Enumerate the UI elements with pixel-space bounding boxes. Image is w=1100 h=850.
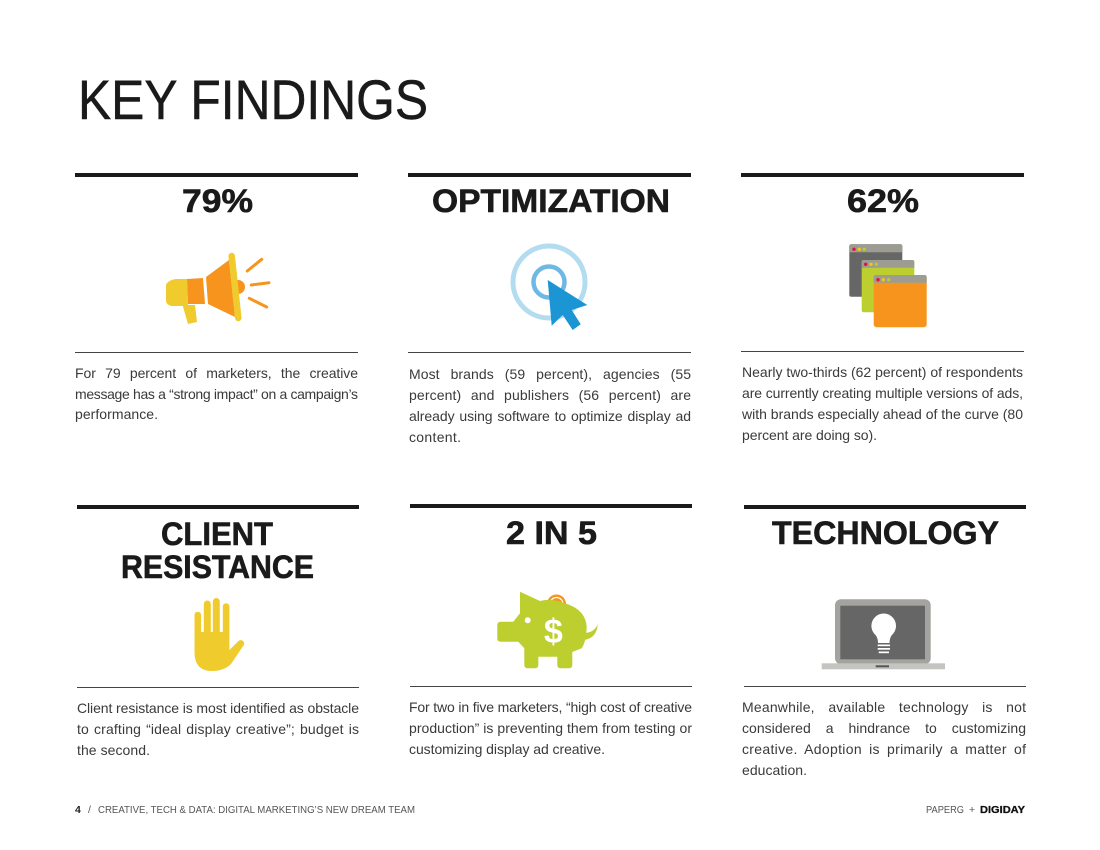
text: 62% body: are currently creating multiple versions of ads, bbox=[742, 385, 1023, 401]
footer: logos: + bbox=[969, 804, 975, 816]
text: technology body: education. bbox=[742, 762, 807, 778]
panel: client resistance bbox=[77, 505, 359, 758]
text: optimization body: Most brands (59 percent), agencies (55 bbox=[409, 366, 691, 382]
text: optimization body bbox=[409, 366, 691, 445]
text: technology body bbox=[742, 699, 1026, 778]
icon: piggy bank: $ bbox=[544, 613, 563, 651]
text: 62% body bbox=[741, 364, 1023, 443]
heading: technology: TECHNOLOGY bbox=[772, 515, 999, 551]
heading: 2 in 5: 2 IN 5 bbox=[506, 515, 597, 551]
text: 79% body: performance. bbox=[75, 406, 158, 422]
text: 2 in 5 body: customizing display ad creative. bbox=[409, 741, 605, 757]
icon: browser windows bbox=[849, 244, 927, 327]
text: optimization body: already using software to optimize display ad bbox=[409, 408, 691, 424]
panel: 79% bbox=[75, 173, 358, 422]
footer: logos: DIGIDAY bbox=[980, 804, 1025, 816]
icon: target and cursor bbox=[513, 246, 587, 330]
icon: piggy bank bbox=[497, 592, 598, 668]
icon: raised hand bbox=[194, 598, 244, 671]
panel: 62% bbox=[741, 173, 1024, 443]
text: 2 in 5 body bbox=[409, 699, 692, 757]
text: client resistance body: the second. bbox=[77, 742, 150, 758]
text: 62% body: percent are doing so). bbox=[742, 427, 877, 443]
footer: page title: CREATIVE, TECH & DATA: DIGITAL MARKETING’S NEW DREAM TEAM bbox=[98, 804, 415, 816]
heading: 62%: 62% bbox=[847, 183, 919, 219]
text: technology body: Meanwhile, available technology is not bbox=[742, 699, 1026, 715]
footer: logos bbox=[926, 804, 1025, 816]
text: 79% body: message has a “strong impact” on a campaign’s bbox=[75, 386, 358, 402]
heading: client resistance: CLIENT bbox=[161, 516, 273, 552]
text: 62% body: Nearly two-thirds (62 percent) of respondents bbox=[742, 364, 1023, 380]
text: technology body: creative. Adoption is primarily a matter of bbox=[742, 741, 1026, 757]
icon: megaphone bbox=[166, 256, 269, 324]
panel: 2 in 5 bbox=[409, 504, 692, 757]
text: 2 in 5 body: For two in five marketers, “high cost of creative bbox=[409, 699, 692, 715]
text: client resistance body: Client resistance is most identified as obstacle bbox=[77, 700, 359, 716]
text: 79% body: For 79 percent of marketers, the creative bbox=[75, 365, 358, 381]
title: KEY FINDINGS bbox=[78, 68, 428, 131]
text: 2 in 5 body: production” is preventing them from testing or bbox=[409, 720, 692, 736]
text: optimization body: content. bbox=[409, 429, 461, 445]
text: technology body: considered a hindrance to customizing bbox=[742, 720, 1026, 736]
text: optimization body: percent) and publishers (56 percent) are bbox=[409, 387, 691, 403]
text: 79% body bbox=[75, 365, 358, 422]
panel: technology bbox=[742, 505, 1026, 778]
text: client resistance body: to crafting “ideal display creative”; budget is bbox=[77, 721, 359, 737]
heading: client resistance bbox=[121, 516, 314, 585]
panel: optimization bbox=[408, 173, 691, 445]
heading: client resistance: RESISTANCE bbox=[121, 549, 314, 585]
heading: optimization: OPTIMIZATION bbox=[432, 183, 670, 219]
text: client resistance body bbox=[77, 700, 359, 758]
footer: logos: PAPERG bbox=[926, 804, 964, 816]
text: 62% body: with brands especially ahead of the curve (80 bbox=[741, 406, 1023, 422]
icon: laptop with light bulb bbox=[822, 599, 945, 669]
footer: page title: 4 bbox=[75, 804, 81, 816]
footer: page title: / bbox=[88, 804, 91, 816]
heading: 79%: 79% bbox=[182, 183, 253, 219]
